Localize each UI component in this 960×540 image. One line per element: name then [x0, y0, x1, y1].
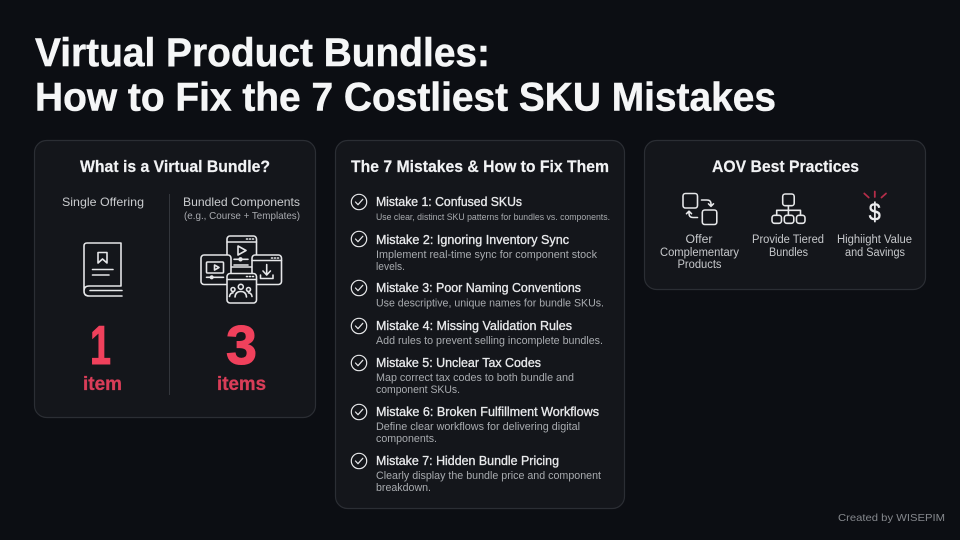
mistake 6: components.	[376, 433, 437, 445]
icon: highlighted dollar	[864, 192, 886, 226]
mistake 5: Map correct tax codes to both bundle and	[376, 372, 574, 384]
mistake 3: Use descriptive, unique names for bundle SKUs.	[376, 298, 604, 310]
stat: 1 item: 1	[90, 314, 111, 376]
icon: bundled components windows	[201, 236, 282, 303]
stat: 3 items: items	[217, 374, 266, 395]
mistake 1	[351, 194, 610, 223]
label: provide tiered bundles	[752, 234, 824, 259]
mistake 7: Clearly display the bundle price and component	[376, 470, 601, 482]
mistake 6: Define clear workflows for delivering digital	[376, 421, 580, 433]
mistake 2: levels.	[376, 261, 405, 273]
panel: what is a virtual bundle	[34, 140, 316, 418]
mistake 1: Mistake 1: Confused SKUs	[376, 195, 522, 209]
label: offer complementary products: Complementary	[660, 247, 739, 259]
stat: 1 item: item	[83, 374, 122, 395]
label: offer complementary products: Offer	[686, 234, 713, 246]
label: provide tiered bundles: Provide Tiered	[752, 234, 824, 246]
mistake 1: Use clear, distinct SKU patterns for bundles vs. components.	[376, 212, 610, 223]
mistake 2: Mistake 2: Ignoring Inventory Sync	[376, 233, 569, 247]
heading: aov best practices: AOV Best Practices	[712, 157, 859, 176]
mistake 7	[351, 453, 601, 494]
label: bundled components: Bundled Components	[183, 195, 300, 209]
mistake 4	[351, 318, 603, 347]
mistake 6	[351, 404, 599, 445]
label: bundled components: (e.g., Course + Templates)	[184, 210, 300, 222]
mistake 5: Mistake 5: Unclear Tax Codes	[376, 356, 541, 370]
heading: the 7 mistakes: The 7 Mistakes & How to Fix Them	[351, 157, 609, 176]
title: How to Fix the 7 Costliest SKU Mistakes	[35, 76, 776, 120]
icon: tiered hierarchy	[772, 194, 805, 223]
label: single offering: Single Offering	[62, 195, 144, 209]
mistake 3	[351, 280, 604, 310]
label: offer complementary products	[660, 234, 739, 271]
title	[35, 31, 776, 120]
mistake 7: Mistake 7: Hidden Bundle Pricing	[376, 454, 559, 468]
mistake 7: breakdown.	[376, 482, 431, 494]
heading: what is a virtual bundle: What is a Virtual Bundle?	[80, 157, 270, 176]
mistake 4: Mistake 4: Missing Validation Rules	[376, 319, 572, 333]
stat: 3 items	[217, 314, 266, 395]
icon: highlighted dollar: $	[869, 198, 881, 226]
mistake 2: Implement real-time sync for component stock	[376, 249, 597, 261]
label: highlight value and savings	[837, 234, 912, 259]
panel: aov best practices	[644, 140, 926, 290]
label: highlight value and savings: and Savings	[845, 247, 905, 259]
mistake 5: component SKUs.	[376, 384, 460, 396]
mistake 6: Mistake 6: Broken Fulfillment Workflows	[376, 405, 599, 419]
label: highlight value and savings: Highiight Value	[837, 234, 912, 246]
footer credit: Created by WISEPIM	[838, 512, 945, 524]
stat: 3 items: 3	[226, 314, 257, 376]
icon: book	[84, 243, 122, 296]
mistake 2	[351, 231, 597, 273]
label: provide tiered bundles: Bundles	[769, 247, 808, 259]
mistake 5	[351, 355, 574, 396]
mistake 4: Add rules to prevent selling incomplete bundles.	[376, 335, 603, 347]
title: Virtual Product Bundles:	[35, 31, 490, 75]
label: offer complementary products: Products	[678, 259, 722, 271]
mistake 3: Mistake 3: Poor Naming Conventions	[376, 281, 581, 295]
label: bundled components	[183, 195, 300, 222]
panel: the 7 mistakes	[336, 140, 624, 508]
stat: 1 item	[83, 314, 122, 395]
icon: swap products	[683, 194, 717, 224]
